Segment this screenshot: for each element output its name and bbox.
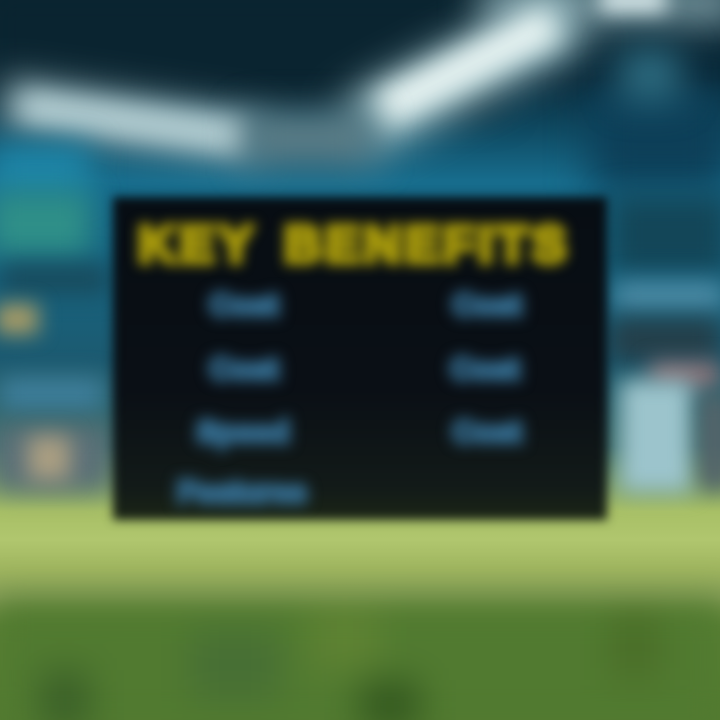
- label 1: Cost: [210, 287, 278, 322]
- floodlight glow: centre: [344, 0, 586, 153]
- left column labels: [168, 283, 316, 514]
- right pale column: [620, 380, 692, 492]
- panel: key benefits board: [113, 197, 607, 520]
- upper right faint glow: [620, 50, 680, 100]
- grass shadow 1: [40, 670, 90, 720]
- grass shadow 4: [610, 610, 660, 680]
- top right haze: [480, 0, 720, 26]
- grass shadow 2: [190, 630, 280, 700]
- title word: benefits: BENEFITS: [284, 216, 570, 274]
- right dark edge: [700, 395, 720, 490]
- left stand dark band: [0, 264, 110, 294]
- grass shadow 3: [360, 680, 420, 720]
- label 2: Cost: [210, 351, 278, 386]
- right dark stand lower: [610, 318, 720, 362]
- label 5: Cost: [453, 287, 521, 322]
- label 6: Cost: [451, 351, 519, 386]
- right blue stand band: [614, 282, 720, 310]
- pitch foreground mottling: [0, 600, 720, 720]
- left blue stand band: [0, 378, 104, 410]
- left yellow stand light: [0, 304, 38, 334]
- floodlight: centre: [375, 9, 559, 123]
- label 4: Features: [177, 474, 307, 509]
- stadium roof: [0, 0, 500, 110]
- floodlight glow: left: [0, 77, 262, 163]
- label 7: Cost: [453, 414, 521, 449]
- left stand blue glow: [0, 145, 90, 195]
- left crowd: [0, 425, 110, 491]
- left stand screen: [0, 192, 90, 256]
- right stand dark: [610, 195, 720, 275]
- floodlight: top right: [600, 0, 666, 12]
- floodlight: left: [19, 92, 246, 152]
- right column labels: [441, 283, 532, 454]
- grass highlight: [310, 610, 380, 670]
- left crowd highlight: [28, 436, 70, 480]
- light haze: [245, 112, 375, 164]
- title word: key: KEY: [138, 216, 257, 274]
- upper right dark stand: [590, 90, 720, 190]
- label 3: Speed: [196, 414, 290, 449]
- title: [130, 214, 576, 274]
- right red crowd: [650, 362, 720, 388]
